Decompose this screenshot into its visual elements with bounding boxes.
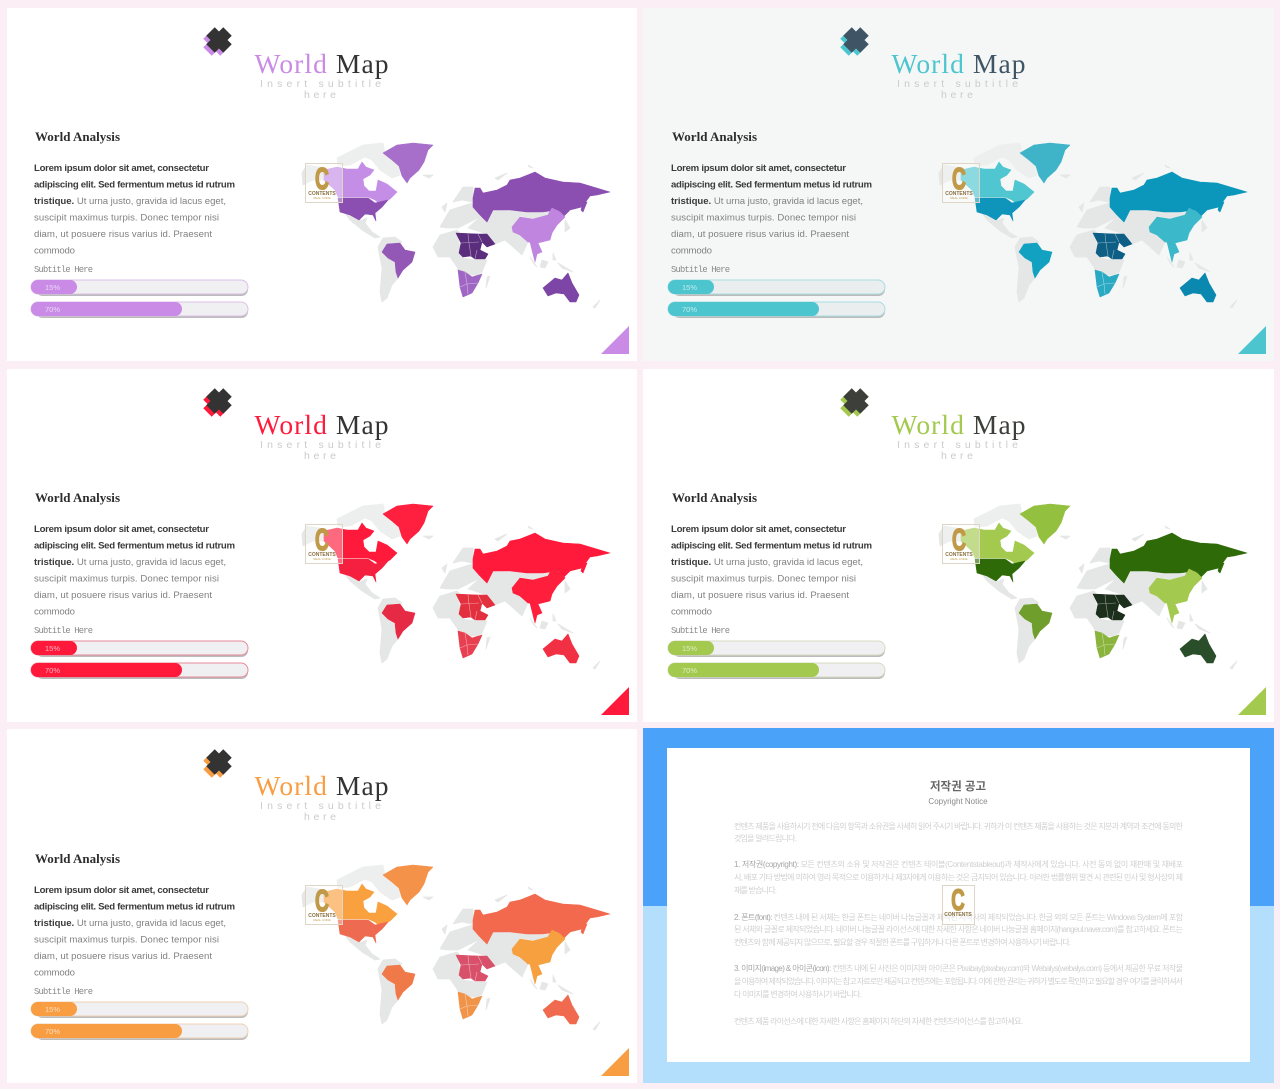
body text: commodo	[671, 606, 712, 618]
title: World Map	[254, 409, 388, 440]
body text: commodo	[34, 246, 75, 256]
corner triangle	[1238, 687, 1266, 715]
body text: adipiscing elit. Sed fermentum metus id rutrum	[671, 180, 872, 190]
body text: diam, ut posuere risus varius id. Praesent	[671, 229, 849, 240]
subtitle: Insert subtitle	[897, 78, 1018, 90]
body text: Lorem ipsum dolor sit amet, consectetur	[671, 524, 846, 535]
body text: suscipit maximus turpis. Donec tempor nisi	[34, 212, 219, 224]
notice intro: 것임을 알려드립니다.	[734, 833, 797, 843]
watermark logo: C	[952, 163, 966, 196]
corner triangle	[601, 1048, 629, 1076]
watermark logo: REAL CODE	[313, 557, 331, 561]
body text: adipiscing elit. Sed fermentum metus id rutrum	[34, 540, 235, 552]
body text	[34, 885, 235, 978]
panel: copyright notice	[643, 728, 1274, 1083]
progress bar 15%	[668, 280, 885, 296]
subtitle	[897, 78, 1018, 101]
subtitle	[260, 439, 381, 462]
progress bar 15%: 15%	[682, 644, 697, 653]
subtitle: here	[941, 450, 973, 462]
watermark logo: C	[952, 524, 966, 557]
heading: World Analysis	[35, 851, 120, 866]
label: subtitle here: Subtitle Here	[34, 626, 93, 636]
body text: adipiscing elit. Sed fermentum metus id rutrum	[34, 902, 235, 912]
notice item 2: 된 서체와 글꼴로 제작되었습니다. 네이버 나눔글꼴 라이선스에 대한 자세한 사항은 네이버 나눔글꼴 홈페이지(hangeul.naver.com)를 참고하세요. 폰트는	[734, 924, 1183, 934]
watermark logo	[306, 524, 342, 564]
panel: orange world map slide	[7, 729, 637, 1083]
watermark logo: C	[315, 524, 329, 557]
panel: green world map slide	[643, 369, 1274, 722]
subtitle: here	[941, 89, 973, 101]
subtitle	[897, 439, 1018, 462]
notice item 3: 다 이미지를 변경하여 사용하시기 바랍니다.	[734, 989, 862, 999]
notice intro	[734, 821, 1184, 843]
body text: diam, ut posuere risus varius id. Praesent	[34, 229, 212, 240]
heading: World Analysis	[672, 490, 757, 505]
body text: adipiscing elit. Sed fermentum metus id rutrum	[671, 540, 872, 552]
watermark logo	[306, 163, 342, 202]
notice item 3: 을 이용하여 제작되었습니다. 이미지는 참고 자료로만 제공되고 컨텐츠에는 포함됩니다. 이에 관한 권리는 귀하가 별도로 확인하고 필요할 경우 여기를 클릭하셔서	[734, 976, 1183, 986]
watermark logo	[942, 884, 974, 924]
progress bar 70%: 70%	[682, 666, 697, 675]
subtitle: Insert subtitle	[897, 439, 1018, 451]
body text: commodo	[34, 606, 75, 618]
body text	[671, 524, 872, 618]
label: subtitle here: Subtitle Here	[34, 265, 93, 275]
icon: cross	[844, 392, 864, 412]
progress bar 15%	[31, 280, 248, 296]
notice item 2: 컨텐츠와 함께 제공되지 않으므로, 필요할 경우 적절한 폰트를 구입하거나 다른 폰트로 변경하여 사용하시기 바랍니다.	[734, 937, 1071, 947]
progress bar 15%: 15%	[45, 1005, 60, 1014]
subtitle: here	[304, 811, 336, 823]
progress bar 15%: 15%	[682, 283, 697, 292]
watermark logo: REAL CODE	[313, 196, 331, 200]
watermark logo	[942, 163, 980, 202]
corner triangle	[601, 326, 629, 354]
watermark logo: CONTENTS	[945, 552, 973, 558]
corner triangle	[1238, 326, 1266, 354]
title: World Map	[892, 409, 1026, 440]
notice item 1: 시, 배포 기타 방법에 의하여 영리 목적으로 이용하거나 제3자에게 이용하는 것은 금지되어 있습니다. 이러한 법률행위 발견 시 관련된 민사 및 형사상의 제	[734, 872, 1183, 882]
icon: cross	[844, 32, 864, 52]
panel: teal world map slide	[643, 8, 1274, 361]
label: subtitle here: Subtitle Here	[671, 626, 730, 636]
watermark logo: C	[315, 163, 329, 196]
notice title: 저작권 공고	[930, 779, 986, 793]
body text	[34, 163, 235, 256]
notice subtitle: Copyright Notice	[928, 797, 988, 806]
subtitle	[260, 78, 381, 101]
body text: Lorem ipsum dolor sit amet, consectetur	[34, 163, 209, 174]
notice item 3: 3. 이미지(image) & 아이콘(icon): 컨텐츠 내에 된 사진은 이미지와 아이콘은 Pixabay(pixabay.com)와 Webalys(webalys.com) 등에서 제공한 무료 저작물	[734, 963, 1183, 973]
progress bar 70%	[31, 663, 248, 679]
subtitle: Insert subtitle	[260, 78, 381, 90]
world map	[302, 143, 610, 308]
body text: suscipit maximus turpis. Donec tempor nisi	[671, 212, 856, 224]
body text: diam, ut posuere risus varius id. Praesent	[34, 951, 212, 962]
body text: diam, ut posuere risus varius id. Praesent	[34, 590, 212, 601]
notice intro: 컨텐츠 제품을 사용하시기 전에 다음의 항목과 소유권을 사세히 읽어 주시기 바랍니다. 귀하가 이 컨텐츠 제품을 사용하는 것은 지분과 계약과 조건에 동의한	[734, 821, 1184, 831]
world map	[939, 504, 1247, 669]
body text: suscipit maximus turpis. Donec tempor nisi	[34, 934, 219, 946]
body text: suscipit maximus turpis. Donec tempor nisi	[34, 574, 219, 584]
watermark logo	[942, 524, 980, 564]
label: subtitle here: Subtitle Here	[671, 265, 730, 275]
icon: cross	[208, 754, 228, 774]
progress bar 15%	[668, 641, 885, 657]
body text: adipiscing elit. Sed fermentum metus id rutrum	[34, 180, 235, 190]
world map	[302, 865, 610, 1030]
notice item 2	[734, 912, 1184, 947]
body text: Lorem ipsum dolor sit amet, consectetur	[34, 524, 209, 535]
heading: World Analysis	[672, 129, 757, 144]
world map	[939, 143, 1247, 308]
progress bar 70%: 70%	[682, 305, 697, 314]
notice closing: 컨텐츠 제품 라이선스에 대한 자세한 사항은 홈페이지 하단의 자세한 컨텐츠라이선스를 참고하세요.	[734, 1016, 1023, 1026]
body text: commodo	[34, 968, 75, 978]
watermark logo: REAL CODE	[950, 196, 968, 200]
title: World Map	[254, 48, 388, 79]
watermark logo: REAL CODE	[313, 918, 331, 922]
body text: tristique. Ut urna justo, gravida id lacus eget,	[34, 196, 226, 207]
watermark logo: CONTENTS	[308, 191, 336, 197]
body text: tristique. Ut urna justo, gravida id lacus eget,	[671, 557, 863, 568]
progress bar 15%: 15%	[45, 644, 60, 653]
subtitle: here	[304, 89, 336, 101]
body text	[671, 163, 872, 256]
notice item 3	[734, 963, 1183, 999]
body text: Lorem ipsum dolor sit amet, consectetur	[34, 885, 209, 896]
progress bar 15%	[31, 641, 248, 657]
notice item 1: 1. 저작권(copyright): 모든 컨텐츠의 소유 및 저작권은 컨텐츠 테이블(Contentstableout)과 제작사에게 있습니다. 사전 동의 없이 재판매 및 재배포	[734, 859, 1183, 869]
progress bar 70%	[31, 302, 248, 318]
watermark logo: C	[951, 884, 965, 917]
watermark logo: C	[315, 885, 329, 918]
progress bar 70%	[668, 302, 885, 318]
subtitle: Insert subtitle	[260, 439, 381, 451]
body text: commodo	[671, 246, 712, 256]
body text: diam, ut posuere risus varius id. Praesent	[671, 590, 849, 601]
progress bar 70%	[668, 663, 885, 679]
notice item 1	[734, 859, 1183, 895]
watermark logo: CONTENTS	[308, 913, 336, 919]
body text: tristique. Ut urna justo, gravida id lacus eget,	[34, 918, 226, 929]
corner triangle	[601, 687, 629, 715]
label: subtitle here: Subtitle Here	[34, 987, 93, 997]
icon: cross	[208, 32, 228, 52]
notice item 2: 2. 폰트(font): 컨텐츠 내에 된 서체는 한글 폰트는 네이버 나눔글꼴과 제작된 저작사의 제작되었습니다. 한글 외의 모든 폰트는 Windows System에 포함	[734, 912, 1184, 922]
watermark logo	[306, 885, 342, 924]
watermark logo: CONTENTS	[308, 552, 336, 558]
icon: cross	[208, 392, 228, 412]
panel: red world map slide	[7, 369, 637, 722]
subtitle	[260, 800, 381, 823]
watermark logo: CONTENTS	[945, 191, 973, 197]
progress bar 70%: 70%	[45, 666, 60, 675]
body text	[34, 524, 235, 618]
subtitle: Insert subtitle	[260, 800, 381, 812]
progress bar 70%: 70%	[45, 1027, 60, 1036]
progress bar 15%	[31, 1002, 248, 1018]
title: World Map	[254, 770, 388, 801]
watermark logo: CONTENTS	[944, 912, 972, 918]
body text: tristique. Ut urna justo, gravida id lacus eget,	[34, 557, 226, 568]
progress bar 70%	[31, 1024, 248, 1040]
progress bar 15%: 15%	[45, 283, 60, 292]
notice item 1: 재를 받습니다.	[734, 885, 777, 895]
title: World Map	[892, 48, 1026, 79]
body text: suscipit maximus turpis. Donec tempor nisi	[671, 574, 856, 584]
subtitle: here	[304, 450, 336, 462]
progress bar 70%: 70%	[45, 305, 60, 314]
watermark logo: REAL CODE	[950, 557, 968, 561]
heading: World Analysis	[35, 490, 120, 505]
panel: purple world map slide	[7, 8, 637, 361]
body text: tristique. Ut urna justo, gravida id lacus eget,	[671, 196, 863, 207]
body text: Lorem ipsum dolor sit amet, consectetur	[671, 163, 846, 174]
heading: World Analysis	[35, 129, 120, 144]
world map	[302, 504, 610, 669]
